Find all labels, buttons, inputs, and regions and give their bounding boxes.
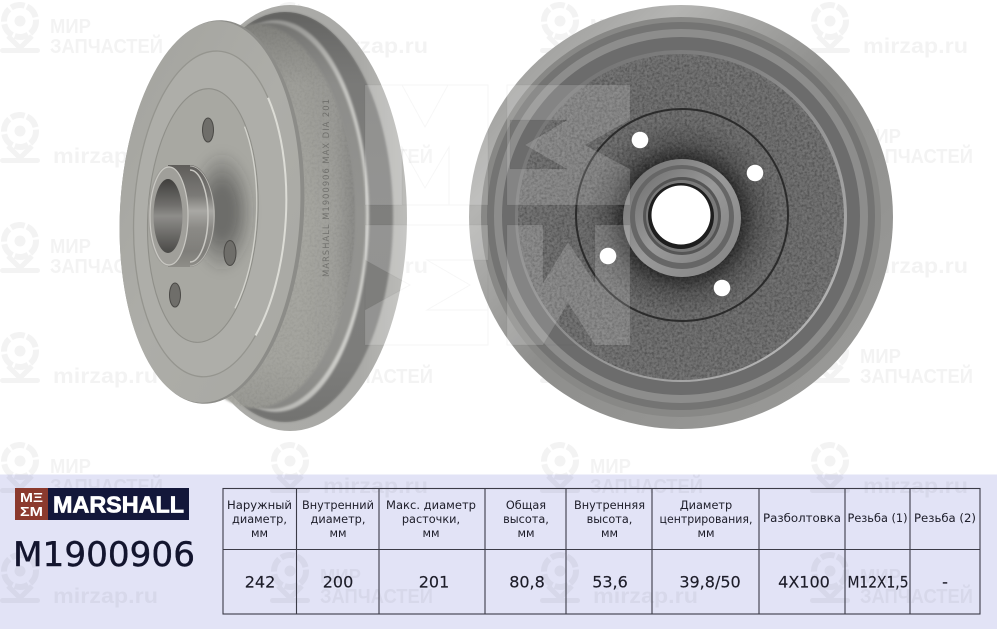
column headers: центрирования, (660, 513, 752, 526)
logo emblem letters: МΞ (20, 490, 43, 505)
bolt hole 4 (600, 248, 616, 264)
hub shadow (190, 150, 254, 274)
bright ridge (183, 20, 369, 412)
watermark grid: ЗАПЧАСТЕЙ (590, 34, 703, 58)
watermark grid: mirzap.ru (593, 365, 698, 388)
rim grooves (481, 17, 881, 417)
column headers (227, 499, 976, 540)
column headers: Разболтовка (763, 512, 841, 525)
stud hole bottom (170, 283, 180, 307)
values: 200 (323, 572, 353, 592)
watermark grid: МИР (320, 346, 361, 368)
column headers: диаметр, (232, 513, 287, 526)
watermark grid: mirzap.ru (323, 255, 428, 278)
watermark grid: МИР (860, 346, 901, 368)
values: 201 (419, 572, 449, 592)
column headers: Внутренняя (574, 499, 645, 512)
column headers: Макс. диаметр (386, 499, 476, 512)
logo emblem letters (20, 490, 43, 519)
watermark grid: МИР (50, 456, 91, 478)
watermark: large brand mark (365, 85, 630, 345)
column headers: Внутренний (302, 499, 374, 512)
watermark grid: МИР (50, 236, 91, 258)
column headers: высота, (587, 513, 632, 526)
logo emblem letters: ΣМ (20, 504, 43, 519)
logo navy plate (15, 488, 189, 520)
watermark grid: ЗАПЧАСТЕЙ (860, 584, 973, 608)
column headers: мм (329, 527, 347, 540)
column headers: мм (251, 527, 268, 540)
watermark grid: mirzap.ru (593, 145, 698, 168)
stud hole top (202, 118, 214, 142)
values: 53,6 (592, 572, 628, 592)
values: 39,8/50 (679, 572, 741, 592)
watermark grid: МИР (50, 16, 91, 38)
watermark grid: ЗАПЧАСТЕЙ (320, 364, 433, 388)
column headers: Резьба (1) (848, 512, 908, 525)
values: M12X1,5 (848, 572, 908, 592)
column headers: Резьба (2) (914, 512, 976, 525)
watermark grid: mirzap.ru (323, 475, 428, 498)
watermark grid: mirzap.ru (863, 255, 968, 278)
watermark grid: mirzap.ru (323, 35, 428, 58)
column headers: Наружный (227, 499, 292, 512)
brake drum: inner view (469, 5, 893, 429)
outer rim (469, 5, 893, 429)
column headers: мм (517, 527, 535, 540)
front disc (110, 15, 314, 409)
watermark grid: mirzap.ru (53, 145, 158, 168)
values: 4X100 (778, 572, 830, 592)
watermark grid: ЗАПЧАСТЕЙ (50, 474, 163, 498)
watermark grid: ЗАПЧАСТЕЙ (50, 254, 163, 278)
watermark grid: mirzap.ru (593, 585, 698, 608)
watermark grid: МИР (590, 456, 631, 478)
column headers: Диаметр (680, 499, 732, 512)
part number: M1900906 (13, 535, 195, 575)
watermark grid: ЗАПЧАСТЕЙ (50, 34, 163, 58)
hub collar (148, 165, 215, 267)
column headers: высота, (503, 513, 549, 526)
watermark grid: mirzap.ru (863, 475, 968, 498)
values: 80,8 (509, 572, 545, 592)
brake drum: outer side view (110, 5, 407, 431)
watermark grid: МИР (590, 16, 631, 38)
bolt hole 1 (632, 132, 648, 148)
values (245, 572, 948, 592)
column headers: Общая (506, 499, 546, 512)
watermark grid: МИР (590, 236, 631, 258)
watermark grid: mirzap.ru (53, 365, 158, 388)
column headers: мм (422, 527, 440, 540)
watermark grid: МИР (860, 126, 901, 148)
watermark grid: ЗАПЧАСТЕЙ (590, 254, 703, 278)
watermark grid: МИР (320, 126, 361, 148)
dark groove band (177, 12, 393, 422)
inner stepped ring (141, 86, 264, 345)
rear flange (173, 5, 407, 431)
watermark grid: mirzap.ru (53, 585, 158, 608)
values: - (942, 572, 948, 592)
bolt hole 3 (714, 280, 730, 296)
column headers: расточки, (402, 513, 460, 526)
column headers: мм (697, 527, 715, 540)
watermark grid: mirzap.ru (863, 35, 968, 58)
column headers: диаметр, (311, 513, 365, 526)
logo: MARSHALL (15, 488, 189, 520)
table grid (223, 488, 980, 614)
column headers: мм (601, 527, 618, 540)
specification table (223, 488, 980, 614)
values: 242 (245, 572, 275, 592)
watermark grid: ЗАПЧАСТЕЙ (860, 144, 973, 168)
bearing hub (623, 159, 741, 277)
watermark grid: МИР (860, 566, 901, 588)
outer stepped ring (125, 47, 294, 381)
textured inner face (518, 54, 844, 380)
logo wordmark: MARSHALL (53, 492, 184, 518)
logo red square (15, 488, 48, 520)
embossed marking: MARSHALL M1900906 MAX DIA 201 (322, 99, 332, 277)
watermark grid: ЗАПЧАСТЕЙ (320, 144, 433, 168)
watermark grid: ЗАПЧАСТЕЙ (320, 584, 433, 608)
watermark grid: ЗАПЧАСТЕЙ (590, 474, 703, 498)
machined groove circle (576, 109, 788, 321)
stud hole middle (224, 240, 236, 266)
panel: specification band (0, 474, 997, 629)
drum cylinder (174, 23, 366, 409)
bolt hole 2 (747, 165, 763, 181)
watermark grid: МИР (320, 566, 361, 588)
watermark grid: ЗАПЧАСТЕЙ (860, 364, 973, 388)
